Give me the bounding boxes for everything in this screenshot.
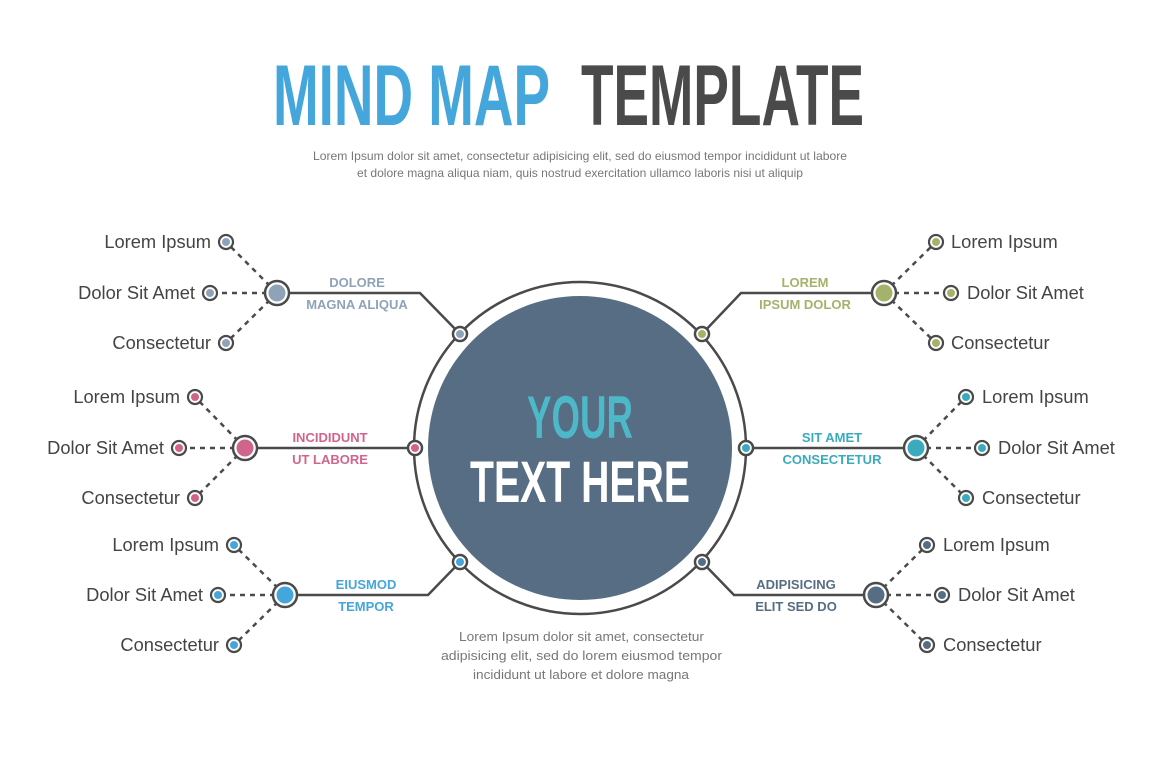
branch: sit amet consectetur: SIT AMET bbox=[802, 430, 862, 445]
branch: eiusmod tempor: Dolor Sit Amet bbox=[86, 584, 203, 605]
branch: incididunt ut labore: UT LABORE bbox=[292, 452, 368, 467]
branch: dolore magna aliqua bbox=[78, 231, 467, 353]
branch: adipisicing elit sed do: Consectetur bbox=[943, 634, 1042, 655]
branch: incididunt ut labore: Lorem Ipsum bbox=[73, 386, 180, 407]
subtitle bbox=[313, 149, 847, 180]
subtitle: Lorem Ipsum dolor sit amet, consectetur adipisicing elit, sed do eiusmod tempor incididunt ut labore bbox=[313, 149, 847, 163]
dashed leaf connectors bbox=[179, 242, 982, 645]
branch: eiusmod tempor: Consectetur bbox=[120, 634, 219, 655]
branch: lorem ipsum dolor: Consectetur bbox=[951, 332, 1050, 353]
bottom description bbox=[441, 630, 722, 682]
branch: dolore magna aliqua: Lorem Ipsum bbox=[104, 231, 211, 252]
branch: lorem ipsum dolor: IPSUM DOLOR bbox=[759, 297, 851, 312]
central circle bbox=[414, 282, 746, 614]
branch: sit amet consectetur: Consectetur bbox=[982, 487, 1081, 508]
branch: sit amet consectetur: Lorem Ipsum bbox=[982, 386, 1089, 407]
branch: sit amet consectetur: Dolor Sit Amet bbox=[998, 437, 1115, 458]
branch: dolore magna aliqua: Dolor Sit Amet bbox=[78, 282, 195, 303]
branch: adipisicing elit sed do: ELIT SED DO bbox=[755, 599, 837, 614]
branch: eiusmod tempor: TEMPOR bbox=[338, 599, 394, 614]
connector lines bbox=[245, 293, 916, 595]
branch: dolore magna aliqua: DOLORE bbox=[329, 275, 385, 290]
branch: sit amet consectetur bbox=[739, 386, 1115, 508]
branch: incididunt ut labore bbox=[47, 386, 422, 508]
branch: incididunt ut labore: Consectetur bbox=[81, 487, 180, 508]
branch: eiusmod tempor: Lorem Ipsum bbox=[112, 534, 219, 555]
bottom description: incididunt ut labore et dolore magna bbox=[473, 668, 689, 682]
branch: dolore magna aliqua: Consectetur bbox=[112, 332, 211, 353]
branch: sit amet consectetur: CONSECTETUR bbox=[783, 452, 882, 467]
branch: adipisicing elit sed do: Lorem Ipsum bbox=[943, 534, 1050, 555]
branch: incididunt ut labore: INCIDIDUNT bbox=[292, 430, 368, 445]
branch: eiusmod tempor bbox=[86, 534, 467, 655]
central circle: YOUR bbox=[527, 384, 633, 451]
branch: adipisicing elit sed do: Dolor Sit Amet bbox=[958, 584, 1075, 605]
branch: adipisicing elit sed do bbox=[695, 534, 1075, 655]
subtitle: et dolore magna aliqua niam, quis nostrud exercitation ullamco laboris nisi ut aliquip bbox=[357, 166, 803, 180]
branch: lorem ipsum dolor: LOREM bbox=[782, 275, 828, 290]
branch: lorem ipsum dolor bbox=[695, 231, 1084, 353]
branch: lorem ipsum dolor: Dolor Sit Amet bbox=[967, 282, 1084, 303]
central circle: TEXT HERE bbox=[470, 450, 690, 515]
bottom description: adipisicing elit, sed do lorem eiusmod tempor bbox=[441, 649, 722, 663]
branch: adipisicing elit sed do: ADIPISICING bbox=[756, 577, 836, 592]
title: TEMPLATE bbox=[581, 48, 864, 144]
branch: lorem ipsum dolor: Lorem Ipsum bbox=[951, 231, 1058, 252]
bottom description: Lorem Ipsum dolor sit amet, consectetur bbox=[459, 630, 704, 644]
branch: dolore magna aliqua: MAGNA ALIQUA bbox=[306, 297, 408, 312]
branch: eiusmod tempor: EIUSMOD bbox=[336, 577, 396, 592]
title: MIND MAP bbox=[273, 48, 550, 144]
branch: incididunt ut labore: Dolor Sit Amet bbox=[47, 437, 164, 458]
